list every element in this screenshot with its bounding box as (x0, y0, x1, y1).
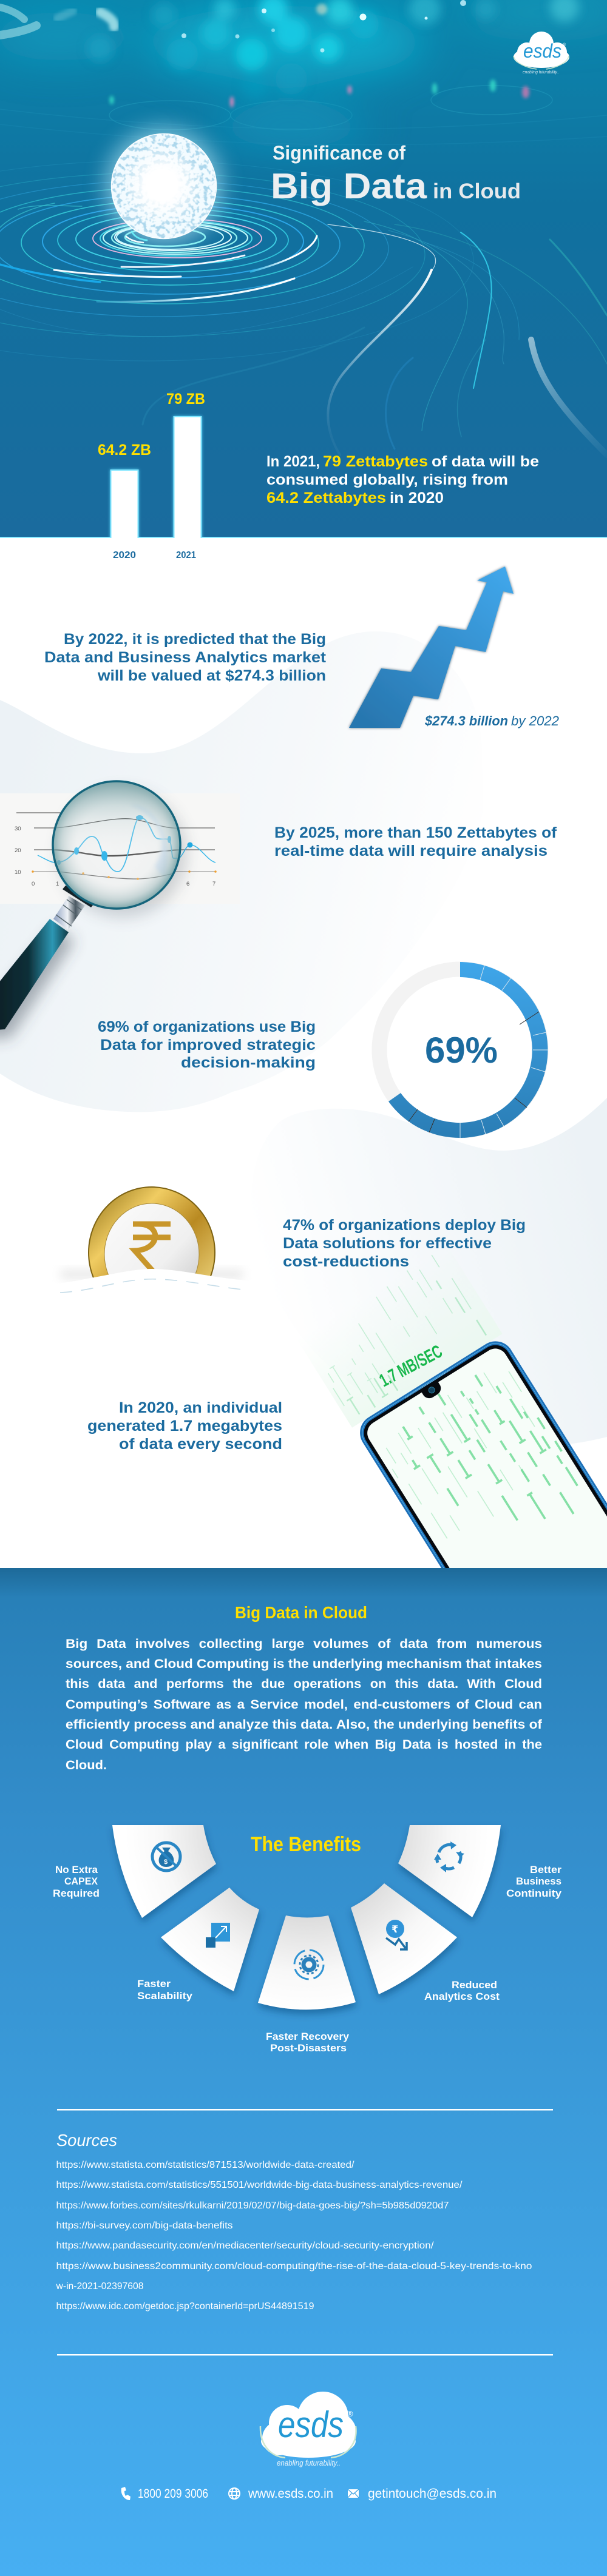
benefit: reduced analytics cost: Reduced (452, 1979, 497, 1991)
sources list: https://bi-survey.com/big-data-benefits (56, 2221, 233, 2231)
sources list: https://www.statista.com/statistics/871513/worldwide-data-created/ (56, 2160, 354, 2170)
chart card under magnifier (0, 793, 240, 904)
ripple accent dots (109, 79, 529, 107)
chart card under magnifier: 1 (56, 881, 59, 887)
text block: explanation: Computing’s Software as a Service model, end-customers of Cloud can (66, 1698, 542, 1712)
text: 69 percent (98, 1018, 316, 1071)
logo: esds top: ® (563, 42, 566, 47)
text: arrow caption (425, 715, 559, 728)
icon: mail (348, 2489, 359, 2498)
icon: scaling squares (206, 1923, 230, 1948)
contact row: 1800 209 3006 (138, 2487, 208, 2501)
heading: sources: Sources (56, 2131, 117, 2150)
chart card under magnifier: 0 (32, 881, 35, 887)
benefit: no extra capex: CAPEX (64, 1875, 98, 1887)
benefit: better business continuity (398, 1825, 562, 1917)
text: 69 percent: Data for improved strategic (100, 1037, 316, 1054)
title: in Cloud (433, 180, 521, 203)
bokeh lights (88, 0, 582, 75)
title: Big Data (271, 166, 427, 206)
chart card under magnifier: 2 (82, 881, 85, 887)
heading: big data in cloud: Big Data in Cloud (235, 1603, 367, 1622)
chart card under magnifier: 3 (108, 881, 111, 887)
benefit: reduced analytics cost: Analytics Cost (424, 1991, 500, 2002)
text: 47 percent (283, 1217, 526, 1270)
logo: esds top (514, 32, 569, 75)
bar chart: data consumed: 79 ZB (166, 391, 205, 408)
heading: the benefits: The Benefits (251, 1833, 361, 1856)
text: 79 zettabytes stat: 79 Zettabytes (323, 453, 428, 470)
contact row (121, 2487, 497, 2501)
sources list: https://www.idc.com/getdoc.jsp?containerId=prUS44891519 (56, 2301, 314, 2312)
chart card under magnifier: 5 (161, 881, 164, 887)
text: 150 zettabytes: By 2025, more than 150 Zettabytes of (274, 824, 557, 841)
chart card under magnifier: 20 (15, 847, 21, 854)
text block: explanation: this data and performs the due operations on this data. With Cloud (66, 1677, 542, 1691)
text: 79 zettabytes stat: in 2020 (390, 489, 444, 506)
bar chart: data consumed: 64.2 ZB (98, 442, 151, 459)
sources list: w-in-2021-02397608 (55, 2281, 144, 2292)
text: 1.7 megabytes (87, 1399, 282, 1453)
chart card under magnifier: 10 (15, 869, 21, 876)
logo: esds top: esds (523, 40, 561, 62)
year labels: 2020 (113, 550, 136, 560)
data rain above phone (297, 1245, 503, 1428)
contact row: www.esds.co.in (248, 2487, 333, 2501)
benefit: no extra capex: No Extra (55, 1864, 98, 1875)
text: arrow caption: $274.3 billion (424, 713, 508, 728)
benefit: faster recovery (258, 1915, 356, 2054)
logo: esds bottom: esds (278, 2404, 344, 2445)
icon: circular arrows (434, 1841, 464, 1872)
text block: explanation: efficiently process and analyze this data. Also, the underlying benefits of (66, 1718, 543, 1732)
text block: explanation (66, 1637, 543, 1772)
text: 1.7 megabytes: generated 1.7 megabytes (87, 1417, 282, 1434)
year labels (113, 551, 196, 558)
benefit: better business continuity: Continuity (506, 1888, 562, 1899)
title: Significance of (273, 142, 405, 164)
icon: growth arrow (349, 567, 514, 728)
faint background ripples (109, 85, 552, 130)
text: 150 zettabytes: real-time data will require analysis (274, 842, 548, 859)
text: 79 zettabytes stat: consumed globally, rising from (266, 471, 508, 488)
sources list: https://www.business2community.com/cloud-computing/the-rise-of-the-data-cloud-5-key-trends-to-kno (56, 2261, 532, 2272)
benefit: faster recovery: Faster Recovery (266, 2031, 350, 2042)
background blob left (0, 633, 362, 1112)
sources list: https://www.pandasecurity.com/en/mediacenter/security/cloud-security-encryption/ (56, 2241, 434, 2251)
benefit: faster recovery: Post-Disasters (270, 2042, 347, 2054)
icon: rupee falling: ₹ (392, 1923, 398, 1935)
sources list (55, 2160, 532, 2312)
text block: explanation: Big Data involves collecting large volumes of data from numerous (66, 1637, 542, 1651)
logo: esds top: enabling futurability.. (523, 70, 559, 75)
text: market value: By 2022, it is predicted that the Big (64, 631, 326, 648)
benefit: better business continuity: Better (530, 1864, 561, 1875)
text: 47 percent: 47% of organizations deploy Big (283, 1217, 526, 1234)
text: 47 percent: cost-reductions (283, 1253, 409, 1270)
bright arcs (0, 203, 317, 302)
sharp bokeh dots (181, 0, 466, 52)
benefit: reduced analytics cost (351, 1883, 500, 2002)
logo: esds bottom (260, 2392, 356, 2467)
chart card under magnifier: 4 (134, 881, 137, 887)
text: 69 percent: 69% of organizations use Big (98, 1018, 316, 1035)
text block: explanation: sources, and Cloud Computing is the underlying mechanism that intakes (66, 1657, 542, 1671)
benefit: better business continuity: Business (516, 1875, 561, 1887)
title (271, 142, 521, 206)
text block: explanation: Cloud. (66, 1758, 107, 1772)
text: market value: Data and Business Analytics market (44, 649, 327, 666)
phone body (353, 1334, 607, 1756)
data rain on screen (371, 1354, 593, 1582)
icon: smartphone with data rain (297, 1245, 607, 1757)
chart: 69 percent donut: 69% (425, 1030, 498, 1071)
text: 79 zettabytes stat: of data will be (432, 453, 539, 470)
icon: magnifying glass (0, 779, 185, 1031)
panel: hero background (0, 0, 607, 539)
hazy glow (0, 0, 607, 148)
text: 1.7 megabytes: of data every second (119, 1436, 282, 1453)
sources list: https://www.forbes.com/sites/rkulkarni/2019/02/07/big-data-goes-big/?sh=5b985d0920d7 (56, 2201, 449, 2211)
benefit: no extra capex: Required (53, 1888, 100, 1899)
icon: globe (229, 2488, 240, 2499)
chart card under magnifier: 7 (212, 881, 215, 887)
sources list: https://www.statista.com/statistics/551501/worldwide-big-data-business-analytics-revenue/ (56, 2180, 463, 2190)
chart card under magnifier: 6 (186, 881, 189, 887)
text: 1.7 megabytes: In 2020, an individual (119, 1399, 282, 1416)
text: 79 zettabytes stat (266, 453, 539, 506)
text: market value: will be valued at $274.3 billion (97, 667, 326, 684)
text: market value (44, 631, 327, 684)
chart: 69 percent donut (379, 962, 548, 1138)
icon: gear with arrows (294, 1950, 324, 1979)
bar chart: data consumed (0, 391, 607, 539)
icon: rupee coin in pocket (60, 1186, 243, 1293)
icon: crossed money bag: $ (164, 1858, 168, 1866)
logo: esds bottom: enabling futurability.. (277, 2458, 341, 2467)
speed label: 1.7 MB/SEC (376, 1341, 446, 1391)
swirl rings (0, 161, 473, 361)
long flowing streaks (0, 221, 607, 455)
benefit: faster scalability (137, 1888, 259, 2002)
benefit: faster scalability: Faster (137, 1978, 171, 1989)
chart card under magnifier: 30 (15, 826, 21, 832)
icon: crossed money bag (152, 1843, 180, 1871)
text block: explanation: Cloud Computing play a significant role when Big Data is hosted in the (66, 1738, 542, 1752)
divider top (57, 2109, 553, 2111)
text: 79 zettabytes stat: 64.2 Zettabytes (266, 489, 386, 506)
text: arrow caption: by 2022 (511, 713, 559, 728)
contact row: getintouch@esds.co.in (368, 2487, 497, 2501)
data sphere (106, 128, 222, 244)
pale ring fragments (0, 7, 114, 35)
panel: big data in cloud (0, 1568, 607, 2576)
logo: esds bottom: ® (347, 2409, 353, 2418)
year labels: 2021 (176, 550, 196, 560)
icon: phone (121, 2487, 131, 2500)
text: 150 zettabytes (274, 824, 557, 859)
icon: rupee falling (386, 1920, 407, 1949)
panel: white statistics section (0, 551, 607, 1568)
text: 79 zettabytes stat: In 2021, (266, 453, 320, 470)
text: 69 percent: decision-making (181, 1054, 316, 1071)
benefit: no extra capex (53, 1825, 216, 1918)
text: 47 percent: Data solutions for effective (283, 1235, 492, 1252)
benefit: faster scalability: Scalability (137, 1990, 193, 2002)
background blob right (348, 1098, 607, 1444)
divider bottom (57, 2354, 553, 2356)
